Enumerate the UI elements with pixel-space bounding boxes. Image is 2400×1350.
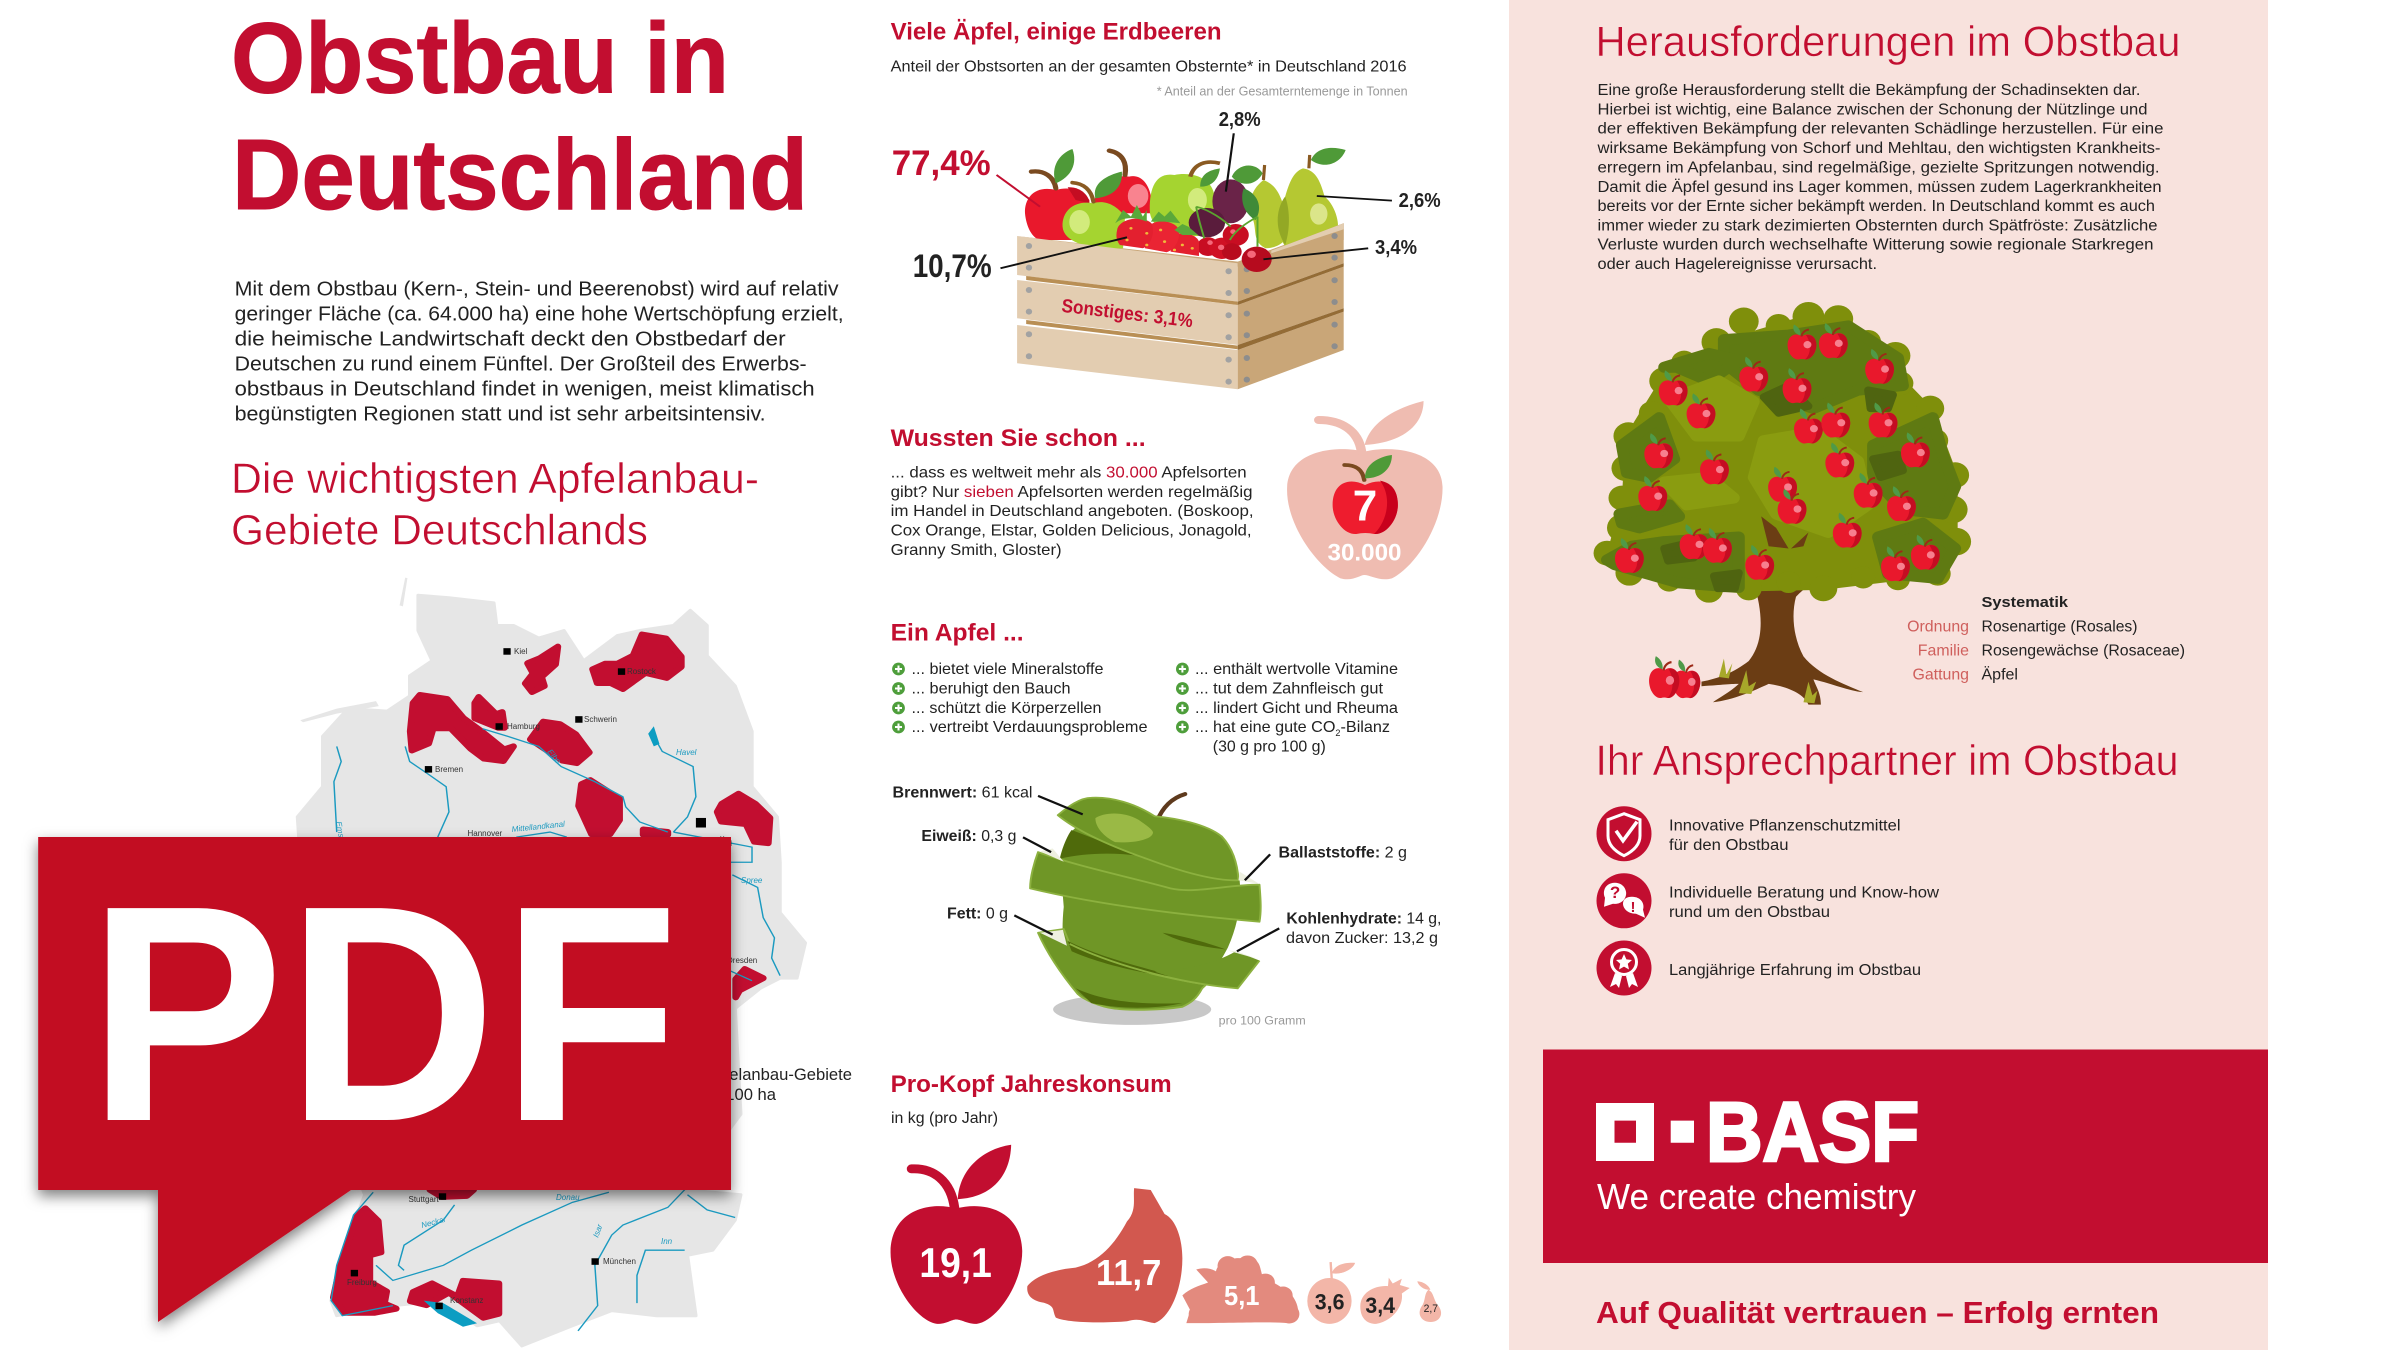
city labels: München xyxy=(603,1257,636,1266)
PDF badge xyxy=(38,837,731,1322)
challenges text: erregern im Apfelanbau, sind regelmäßige, gezielte Spritzungen notwendig. xyxy=(1598,160,2160,177)
leader lines xyxy=(997,133,1392,268)
intro text: begünstigten Regionen statt und ist sehr arbeitsintensiv. xyxy=(235,404,766,426)
strawberries xyxy=(1115,205,1199,256)
systematics table: Familie xyxy=(1918,642,1969,660)
did you know text: Granny Smith, Gloster) xyxy=(891,542,1062,559)
map legend xyxy=(687,1065,852,1104)
challenges text: oder auch Hagelereignisse verursacht. xyxy=(1598,256,1877,273)
map legend: Apfelanbau-Gebiete xyxy=(704,1065,852,1084)
consumption values: 3,6 xyxy=(1315,1290,1344,1314)
city labels: Stuttgart xyxy=(408,1195,440,1204)
intro text: die heimische Landwirtschaft deckt den Obstbedarf der xyxy=(235,329,786,351)
text: advice: rund um den Obstbau xyxy=(1669,904,1830,921)
PDF badge: P xyxy=(88,842,284,1186)
text: experience: Langjährige Erfahrung im Obstbau xyxy=(1669,962,1921,979)
city labels: Rostock xyxy=(627,667,657,676)
river labels: Elbe xyxy=(545,748,563,766)
icon: award xyxy=(1596,940,1652,996)
shadow xyxy=(1053,994,1211,1025)
stem xyxy=(1157,794,1185,822)
intro text: Mit dem Obstbau (Kern-, Stein- und Beerenobst) wird auf relativ xyxy=(235,279,839,301)
systematics table: Rosengewächse (Rosaceae) xyxy=(1982,642,2185,660)
systematics table: Äpfel xyxy=(1982,666,2018,683)
icon: speech bubbles xyxy=(1596,873,1652,928)
systematics table: Rosenartige (Rosales) xyxy=(1982,619,2138,636)
benefits list: ... schützt die Körperzellen xyxy=(912,700,1102,717)
crate bolts xyxy=(1026,233,1338,385)
text: advice: Individuelle Beratung und Know-how xyxy=(1669,885,1940,902)
red apples xyxy=(1025,149,1153,240)
pear xyxy=(1417,1281,1441,1322)
benefits list: ... hat eine gute CO xyxy=(1195,719,1334,736)
consumption values: 19,1 xyxy=(919,1239,992,1286)
flesh wedges xyxy=(1040,848,1259,959)
crate inner xyxy=(1017,223,1344,267)
benefits list: ... vertreibt Verdauungsprobleme xyxy=(912,719,1148,736)
title: Deutschland xyxy=(232,119,808,231)
challenges text: der effektiven Bekämpfung der relevanten Schädlinge herzustellen. Für eine xyxy=(1598,121,2164,138)
BASF logo mark xyxy=(1596,1103,1694,1161)
benefits list: (30 g pro 100 g) xyxy=(1213,739,1326,756)
fallen apples xyxy=(1649,656,1700,698)
intro text xyxy=(235,279,844,426)
panel: challenges and contact xyxy=(1509,0,2268,1350)
cherries xyxy=(1196,207,1257,260)
plums and leaves xyxy=(1189,166,1263,237)
river labels: Inn xyxy=(661,1237,673,1246)
nutrition labels: Fett: 0 g xyxy=(947,906,1008,923)
city labels: Bremen xyxy=(435,765,463,774)
city markers xyxy=(351,648,706,1309)
did you know text: Cox Orange, Elstar, Golden Delicious, Jonagold, xyxy=(891,523,1252,540)
fruit percentages: 10,7% xyxy=(913,248,992,284)
bullet icons xyxy=(892,663,1189,733)
slogan: We create chemistry xyxy=(1597,1176,1916,1217)
fruit on the tree xyxy=(1615,323,1940,581)
fruit percentages: Sonstiges: 3,1% xyxy=(1060,296,1194,332)
fruit share subtitle xyxy=(891,59,1408,99)
panel background xyxy=(1509,0,2268,1350)
pears xyxy=(1250,148,1346,248)
fruit percentages: 2,6% xyxy=(1399,190,1441,212)
challenges text: Hierbei ist wichtig, eine Balance zwischen der Schonung der Nützlinge und xyxy=(1598,101,2148,118)
city labels: Dresden xyxy=(727,956,757,965)
map legend: über 100 ha xyxy=(687,1085,777,1104)
grass tufts xyxy=(1719,659,1817,703)
river labels xyxy=(334,748,763,1246)
challenges text: immer wieder zu stark dezimierten Obsternten durch Spätfröste: Zusätzliche xyxy=(1598,217,2158,234)
fruit percentages: 2,8% xyxy=(1219,109,1261,131)
benefits list: -Bilanz xyxy=(1341,719,1390,736)
did you know text xyxy=(891,465,1254,559)
challenges text: bereits vor der Ernte sicher bekämpft werden. In Deutschland kommt es auch xyxy=(1598,198,2155,215)
trunk xyxy=(1701,558,1866,705)
city labels: Berlin xyxy=(699,834,732,849)
nutrition labels: Ballaststoffe: 2 g xyxy=(1278,844,1407,861)
consumption fruit chart xyxy=(891,1145,1441,1324)
inner shade xyxy=(1060,830,1139,859)
peeled green apple illustration xyxy=(1014,794,1279,1025)
leader lines xyxy=(1014,796,1279,951)
apple graphic 30.000 vs 7: 7 xyxy=(1353,482,1377,531)
map heading: Gebiete Deutschlands xyxy=(231,506,648,554)
apple graphic 30.000 vs 7 xyxy=(1287,401,1443,579)
apple body xyxy=(1060,818,1240,1010)
city labels: Freiburg xyxy=(347,1278,377,1287)
text: advice xyxy=(1669,885,1940,921)
islands and spit xyxy=(300,578,407,722)
middle slice xyxy=(1030,852,1261,922)
river labels: Neckar xyxy=(420,1215,447,1230)
map heading: Die wichtigsten Apfelanbau- xyxy=(231,455,759,503)
did you know text: im Handel in Deutschland angeboten. (Boskoop, xyxy=(891,503,1254,520)
nutrition labels: davon Zucker: 13,2 g xyxy=(1286,930,1438,947)
crown xyxy=(1594,302,1971,603)
top slice xyxy=(1058,798,1239,880)
BASF wordmark: BASF xyxy=(1706,1085,1919,1179)
consumption values: 11,7 xyxy=(1096,1252,1161,1293)
text: plant protection: für den Obstbau xyxy=(1669,837,1788,854)
benefits list: ... bietet viele Mineralstoffe xyxy=(912,661,1104,678)
city labels: Konstanz xyxy=(450,1296,483,1305)
consumption values: 5,1 xyxy=(1224,1280,1260,1311)
strawberry xyxy=(1360,1278,1410,1324)
heading: challenges: Herausforderungen im Obstbau xyxy=(1596,18,2180,66)
benefits list: ... enthält wertvolle Vitamine xyxy=(1195,661,1398,678)
river labels: Havel xyxy=(676,748,697,757)
consumption values: 3,4 xyxy=(1365,1293,1396,1318)
heading: per capita consumption: Pro-Kopf Jahreskonsum xyxy=(891,1071,1172,1098)
lower slices xyxy=(1038,929,1206,1010)
title xyxy=(231,3,808,231)
title: Obstbau in xyxy=(231,3,729,115)
text: plant protection: Innovative Pflanzenschutzmittel xyxy=(1669,818,1900,834)
systematics table: Gattung xyxy=(1912,666,1969,683)
benefits list: ... lindert Gicht und Rheuma xyxy=(1195,700,1398,717)
PDF badge: F xyxy=(502,842,679,1186)
nutrition labels: Eiweiß: 0,3 g xyxy=(921,828,1016,845)
consumption values: 2,7 xyxy=(1424,1303,1438,1315)
fruit percentages: 77,4% xyxy=(892,144,991,183)
river labels: Ems xyxy=(334,821,346,838)
BASF block xyxy=(1543,1050,2268,1263)
challenges text xyxy=(1596,82,2164,273)
crate planks xyxy=(1017,223,1344,389)
intro text: Deutschen zu rund einem Fünftel. Der Großteil des Erwerbs- xyxy=(235,354,807,376)
rivers xyxy=(331,729,780,1331)
fruit percentages: 3,4% xyxy=(1375,237,1417,259)
challenges text: Eine große Herausforderung stellt die Bekämpfung der Schadinsekten dar. xyxy=(1598,82,2140,99)
fruit crate illustration xyxy=(997,133,1392,389)
did you know text: gibt? Nur sieben Apfelsorten werden regelmäßig xyxy=(891,484,1253,501)
map heading xyxy=(231,455,759,554)
did you know text: ... dass es weltweit mehr als 30.000 Apfelsorten xyxy=(891,465,1247,482)
heading: did you know: Wussten Sie schon ... xyxy=(891,425,1146,452)
lakes xyxy=(424,726,659,1327)
foliage shades xyxy=(1607,326,1955,588)
nutrition labels: Brennwert: 61 kcal xyxy=(892,785,1032,802)
challenges text: wirksame Bekämpfung von Schorf und Mehltau, den wichtigsten Krankheits- xyxy=(1596,140,2160,157)
apple regions xyxy=(333,635,770,1318)
grapes xyxy=(1182,1255,1299,1324)
heading: contact: Ihr Ansprechpartner im Obstbau xyxy=(1596,737,2178,785)
nutrition labels: pro 100 Gramm xyxy=(1219,1016,1306,1028)
map of Germany xyxy=(297,578,805,1346)
fruit percentages xyxy=(892,109,1441,332)
challenges text: Verluste wurden durch wechselhafte Witterung sowie regionale Starkregen xyxy=(1598,237,2154,254)
consumption unit: in kg (pro Jahr) xyxy=(891,1110,998,1127)
benefits list: ... beruhigt den Bauch xyxy=(912,681,1070,698)
apple graphic 30.000 vs 7: 30.000 xyxy=(1328,540,1402,567)
branches xyxy=(1761,516,1808,549)
icon: speech bubbles: ? xyxy=(1610,883,1620,902)
footer claim: Auf Qualität vertrauen – Erfolg ernten xyxy=(1596,1295,2159,1330)
front cherry xyxy=(1242,247,1272,272)
river labels: Isar xyxy=(591,1223,605,1239)
city labels: Hamburg xyxy=(507,722,540,731)
icon: shield xyxy=(1596,806,1652,861)
heading: one apple: Ein Apfel ... xyxy=(891,620,1024,647)
river labels: Donau xyxy=(556,1193,580,1202)
nutrition labels xyxy=(892,785,1441,1028)
challenges text: Damit die Äpfel gesund ins Lager kommen, müssen zudem Lagerkrankheiten xyxy=(1598,179,2162,196)
fruit share subtitle: Anteil der Obstsorten an der gesamten Obsternte* in Deutschland 2016 xyxy=(891,59,1407,76)
heading: fruit share: Viele Äpfel, einige Erdbeeren xyxy=(891,18,1222,45)
fruit share subtitle: * Anteil an der Gesamterntemenge in Tonnen xyxy=(1157,85,1408,99)
city labels xyxy=(347,647,757,1305)
text: plant protection xyxy=(1669,818,1900,854)
banana xyxy=(1027,1188,1182,1323)
river labels: Spree xyxy=(741,876,763,885)
river labels: Mittellandkanal xyxy=(511,819,566,834)
consumption values xyxy=(919,1239,1438,1318)
icon: speech bubbles: ! xyxy=(1630,899,1636,916)
apple xyxy=(891,1145,1022,1324)
benefits list xyxy=(892,661,1398,756)
green apples xyxy=(1063,162,1220,249)
intro text: geringer Fläche (ca. 64.000 ha) eine hohe Wertschöpfung erzielt, xyxy=(235,304,844,326)
systematics table xyxy=(1907,594,2185,683)
apple tree illustration xyxy=(1594,302,1971,705)
land area xyxy=(297,595,805,1346)
city labels: Kiel xyxy=(514,647,528,656)
systematics table: Systematik xyxy=(1982,594,2069,611)
intro text: obstbaus in Deutschland findet in wenigen, meist klimatisch xyxy=(235,379,815,401)
nutrition labels: Kohlenhydrate: 14 g, xyxy=(1286,910,1441,928)
PDF badge: D xyxy=(287,842,496,1186)
systematics table: Ordnung xyxy=(1907,619,1969,636)
city labels: Schwerin xyxy=(584,715,617,724)
benefits list: ... tut dem Zahnfleisch gut xyxy=(1195,681,1384,698)
city labels: Hannover xyxy=(468,829,503,838)
small apple xyxy=(1307,1262,1355,1324)
benefits list: 2 xyxy=(1335,728,1341,738)
